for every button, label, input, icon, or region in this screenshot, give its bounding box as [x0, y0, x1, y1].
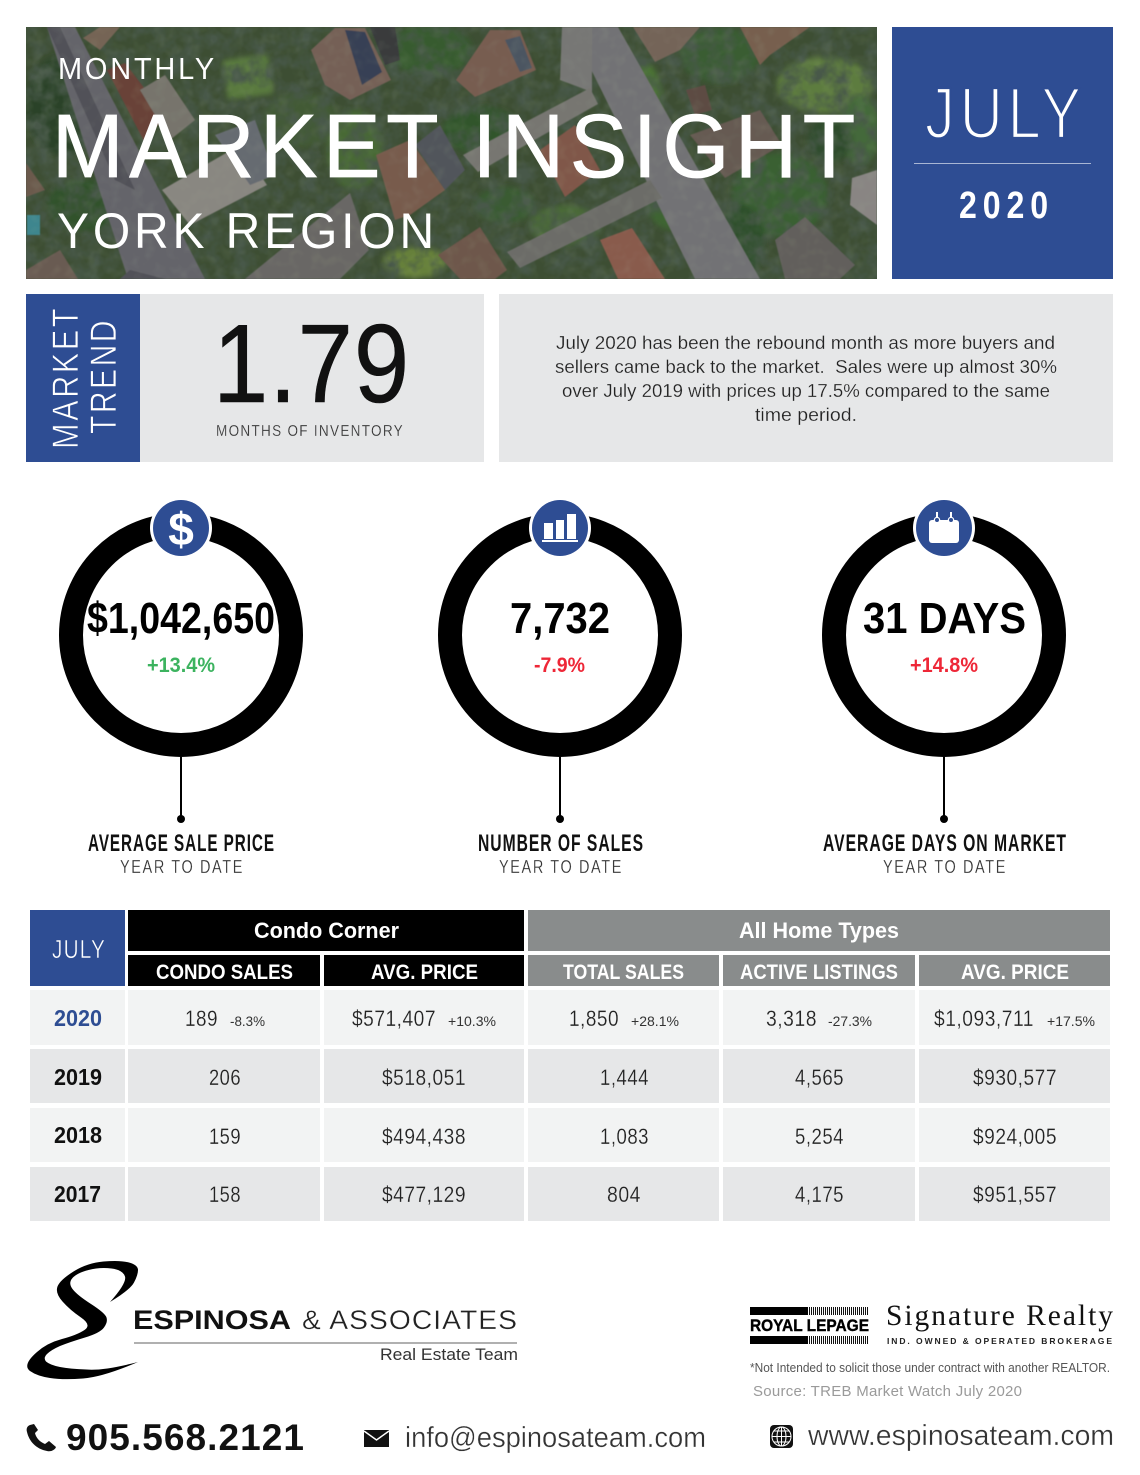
row 2020: +10.3%: [448, 1013, 496, 1029]
icon: dollar sign: [150, 497, 212, 559]
row 2019: $930,577: [973, 1065, 1057, 1090]
table header: AVG. PRICE: [371, 961, 478, 984]
logo: Royal LePage Signature Realty: Signature Realty: [886, 1299, 1115, 1332]
row 2017: 4,175: [795, 1182, 844, 1207]
icon: bar chart: [529, 497, 591, 559]
stat: number of sales: 7,732: [510, 594, 610, 643]
stat: average sale price: AVERAGE SALE PRICE: [88, 830, 275, 857]
row 2018: 5,254: [795, 1124, 844, 1149]
title: monthly market insight york region: MONTHLY: [58, 51, 217, 86]
logo: Royal LePage Signature Realty: [750, 1299, 1115, 1346]
icon: dollar sign: $: [168, 503, 194, 555]
icon: phone: [27, 1424, 56, 1451]
stat: number of sales: -7.9%: [534, 654, 585, 677]
row 2018: $924,005: [973, 1124, 1057, 1149]
icon: calendar: [913, 497, 975, 559]
panel: market trend months of inventory: MARKET: [45, 306, 86, 449]
icon: script E monogram: [27, 1261, 138, 1379]
stat: average days on market: YEAR TO DATE: [883, 857, 1007, 877]
row 2017: 804: [607, 1182, 641, 1207]
row 2017: 2017: [54, 1181, 101, 1207]
stat: number of sales: NUMBER OF SALES: [478, 830, 644, 857]
title: monthly market insight york region: YORK REGION: [57, 203, 438, 259]
row 2020: [30, 990, 1110, 1045]
logo: Royal LePage Signature Realty: IND. OWNED & OPERATED BROKERAGE: [887, 1336, 1112, 1346]
table header: JULY: [52, 934, 106, 964]
panel: market summary text: sellers came back to the market. Sales were up almost 30%: [555, 356, 1057, 377]
icon: envelope: [364, 1430, 389, 1447]
stat: average days on market: +14.8%: [910, 654, 978, 677]
panel: market trend months of inventory: MONTHS OF INVENTORY: [216, 423, 404, 440]
stat: average sale price: [71, 497, 291, 877]
title: monthly market insight york region: MARKET INSIGHT: [52, 97, 861, 197]
table header: [30, 910, 1110, 986]
row 2019: [30, 1049, 1110, 1103]
row 2017: $951,557: [973, 1182, 1057, 1207]
header photo banner: aerial view of houses: [26, 24, 880, 279]
logo: Espinosa & Associates Real Estate Team: [27, 1261, 518, 1379]
row 2018: 1,083: [600, 1124, 649, 1149]
row 2020: $1,093,711: [934, 1006, 1034, 1031]
row 2018: 2018: [54, 1122, 102, 1148]
row 2020: 2020: [54, 1005, 102, 1031]
row 2018: $494,438: [382, 1124, 466, 1149]
row 2020: +28.1%: [631, 1013, 679, 1029]
disclaimer text: *Not Intended to solicit those under contract with another REALTOR.: [750, 1360, 1110, 1375]
stat: average sale price: +13.4%: [147, 654, 215, 677]
panel: date July 2020: JULY: [925, 74, 1086, 154]
row 2020: 1,850: [569, 1006, 619, 1031]
table header: Condo Corner: [254, 918, 399, 943]
panel: market trend months of inventory: TREND: [83, 318, 124, 434]
source note: Source: TREB Market Watch July 2020: [753, 1383, 1022, 1400]
logo: Espinosa & Associates Real Estate Team: ESPINOSA: [133, 1305, 291, 1335]
row 2019: 1,444: [600, 1065, 649, 1090]
panel: market summary text: time period.: [755, 404, 857, 425]
row 2017: $477,129: [382, 1182, 466, 1207]
logo: Royal LePage Signature Realty: ROYAL LEPAGE: [750, 1316, 869, 1335]
row 2020: 3,318: [766, 1006, 817, 1031]
row 2020: -27.3%: [828, 1013, 872, 1029]
panel: market summary text: July 2020 has been the rebound month as more buyers and: [556, 332, 1055, 353]
row 2020: -8.3%: [230, 1013, 265, 1029]
row 2020: 189: [185, 1006, 218, 1031]
logo: Espinosa & Associates Real Estate Team: Real Estate Team: [380, 1345, 518, 1364]
table header: AVG. PRICE: [961, 961, 1069, 984]
logo: Espinosa & Associates Real Estate Team: & ASSOCIATES: [302, 1305, 518, 1335]
panel: date July 2020: [892, 27, 1113, 279]
row 2019: $518,051: [382, 1065, 466, 1090]
row 2018: [30, 1108, 1110, 1162]
panel: date July 2020: 2020: [959, 185, 1054, 227]
table header: ACTIVE LISTINGS: [740, 961, 898, 984]
table: July statistics by year: [30, 910, 1110, 1221]
row 2017: 158: [209, 1182, 241, 1207]
panel: market trend months of inventory: [26, 294, 484, 462]
table header: CONDO SALES: [156, 961, 293, 984]
table header: TOTAL SALES: [563, 961, 684, 984]
panel: market summary text: over July 2019 with prices up 17.5% compared to the same: [562, 380, 1050, 401]
table header: All Home Types: [739, 918, 899, 943]
stat: average sale price: YEAR TO DATE: [120, 857, 244, 877]
row 2020: $571,407: [352, 1006, 436, 1031]
stat: average days on market: 31 DAYS: [863, 594, 1026, 643]
contact: phone: 905.568.2121: [66, 1417, 304, 1458]
row 2019: 206: [209, 1065, 241, 1090]
contact: website: www.espinosateam.com: [807, 1420, 1114, 1452]
stat: number of sales: YEAR TO DATE: [499, 857, 623, 877]
stat: average days on market: [823, 497, 1067, 877]
title: monthly market insight york region: [52, 51, 861, 259]
panel: market trend months of inventory: 1.79: [213, 302, 410, 426]
stat: average sale price: $1,042,650: [87, 594, 275, 643]
contact: email: info@espinosateam.com: [405, 1422, 706, 1454]
row 2020: +17.5%: [1047, 1013, 1095, 1029]
row 2018: 159: [209, 1124, 241, 1149]
icon: globe: [770, 1425, 793, 1448]
row 2017: [30, 1167, 1110, 1221]
panel: market summary text: [499, 294, 1113, 462]
row 2019: 2019: [54, 1064, 102, 1090]
row 2019: 4,565: [795, 1065, 844, 1090]
stat: number of sales: [450, 497, 670, 877]
